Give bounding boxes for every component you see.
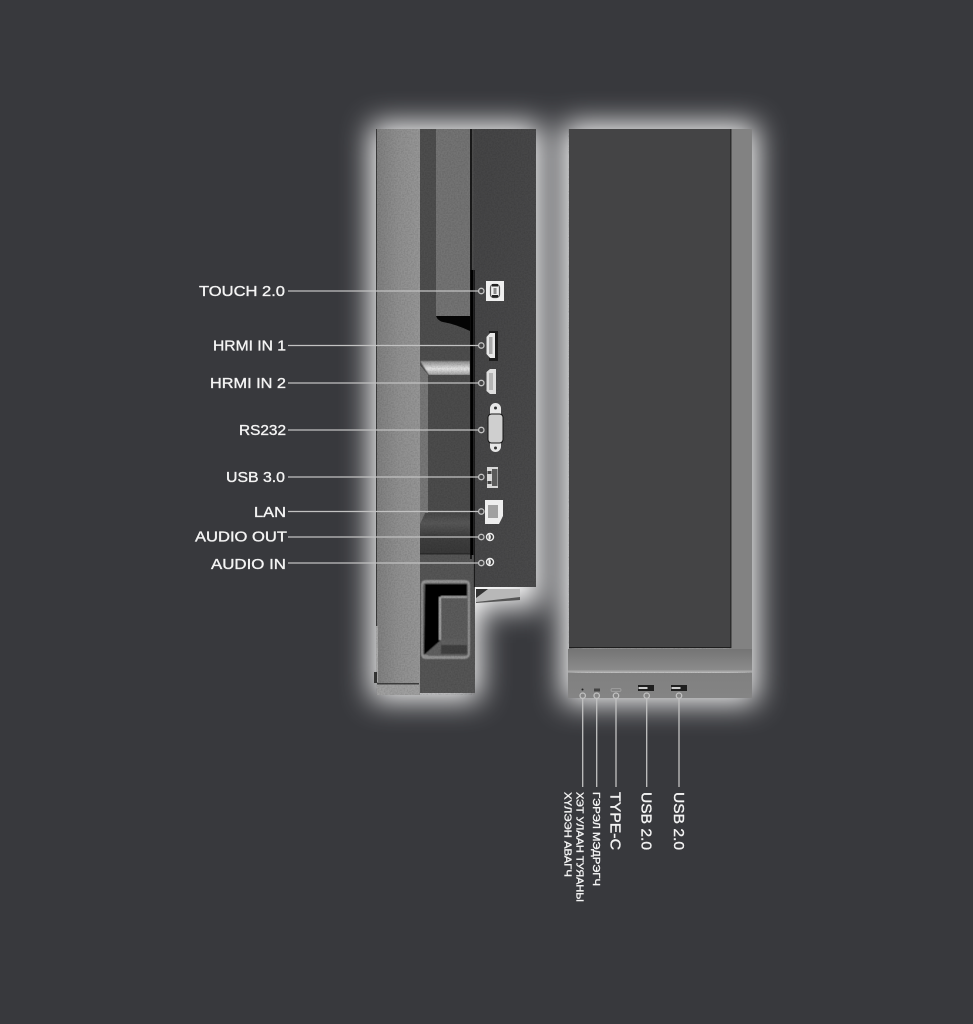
bottom bezel	[568, 649, 752, 671]
black channel	[470, 129, 472, 559]
label: TYPE-C: TYPE-C	[606, 792, 624, 850]
label: TOUCH 2.0: TOUCH 2.0	[199, 283, 285, 300]
label: USB 2.0: USB 2.0	[638, 792, 654, 850]
lower recess	[420, 365, 428, 524]
bracket shadow	[436, 316, 470, 331]
label: AUDIO OUT: AUDIO OUT	[195, 528, 287, 546]
sensor dot	[582, 688, 584, 690]
bottom foot of frame	[377, 684, 419, 695]
infographic canvas	[194, 100, 781, 902]
small side notch	[374, 672, 377, 683]
port: HDMI 2	[486, 369, 496, 394]
bottom leader lines	[580, 693, 682, 787]
label: LAN: LAN	[254, 504, 286, 521]
label: infrared receiver line 2: ХҮЛЭЭН АВАГЧ	[562, 792, 574, 877]
port: USB 3.0	[487, 467, 498, 488]
port: HDMI 1	[486, 331, 498, 361]
inner recess	[420, 129, 474, 693]
label: RS232: RS232	[239, 422, 286, 439]
glow behind devices	[371, 124, 757, 703]
USB 2.0 port	[638, 685, 654, 691]
right bezel	[731, 129, 752, 649]
handle	[421, 580, 470, 659]
label: AUDIO IN: AUDIO IN	[211, 556, 286, 573]
rear panel ports	[485, 281, 504, 566]
lower block	[420, 554, 475, 693]
rear panel	[474, 129, 536, 587]
surface grain	[370, 125, 760, 705]
screen	[569, 129, 731, 648]
left leader lines	[288, 288, 484, 566]
bottom port labels	[562, 792, 687, 902]
port: audio in	[486, 558, 494, 566]
shiny ledge	[420, 361, 470, 375]
upper bracket	[436, 129, 470, 316]
display frame	[568, 129, 752, 698]
label: HRMI IN 2: HRMI IN 2	[210, 375, 286, 392]
USB 2.0 port	[671, 685, 687, 691]
panel foot	[476, 589, 520, 602]
label: light sensor: ГЭРЭЛ МЭДРЭГЧ	[590, 792, 602, 886]
port: LAN	[485, 500, 503, 524]
label: HRMI IN 1: HRMI IN 1	[213, 338, 286, 354]
label: USB 2.0: USB 2.0	[670, 792, 687, 850]
port: audio out	[486, 534, 494, 540]
light sensor	[594, 688, 600, 692]
port: RS232	[488, 403, 503, 452]
side view of display	[374, 129, 536, 695]
label: infrared receiver line 1: ХЭТ УЛААН ТУЯАНЫ	[574, 792, 586, 902]
label: USB 3.0: USB 3.0	[226, 469, 285, 486]
USB type-C port	[611, 688, 621, 692]
side frame	[377, 129, 420, 695]
port: touch USB-B	[486, 281, 504, 301]
left port labels	[195, 283, 287, 573]
front view of display	[568, 129, 752, 698]
